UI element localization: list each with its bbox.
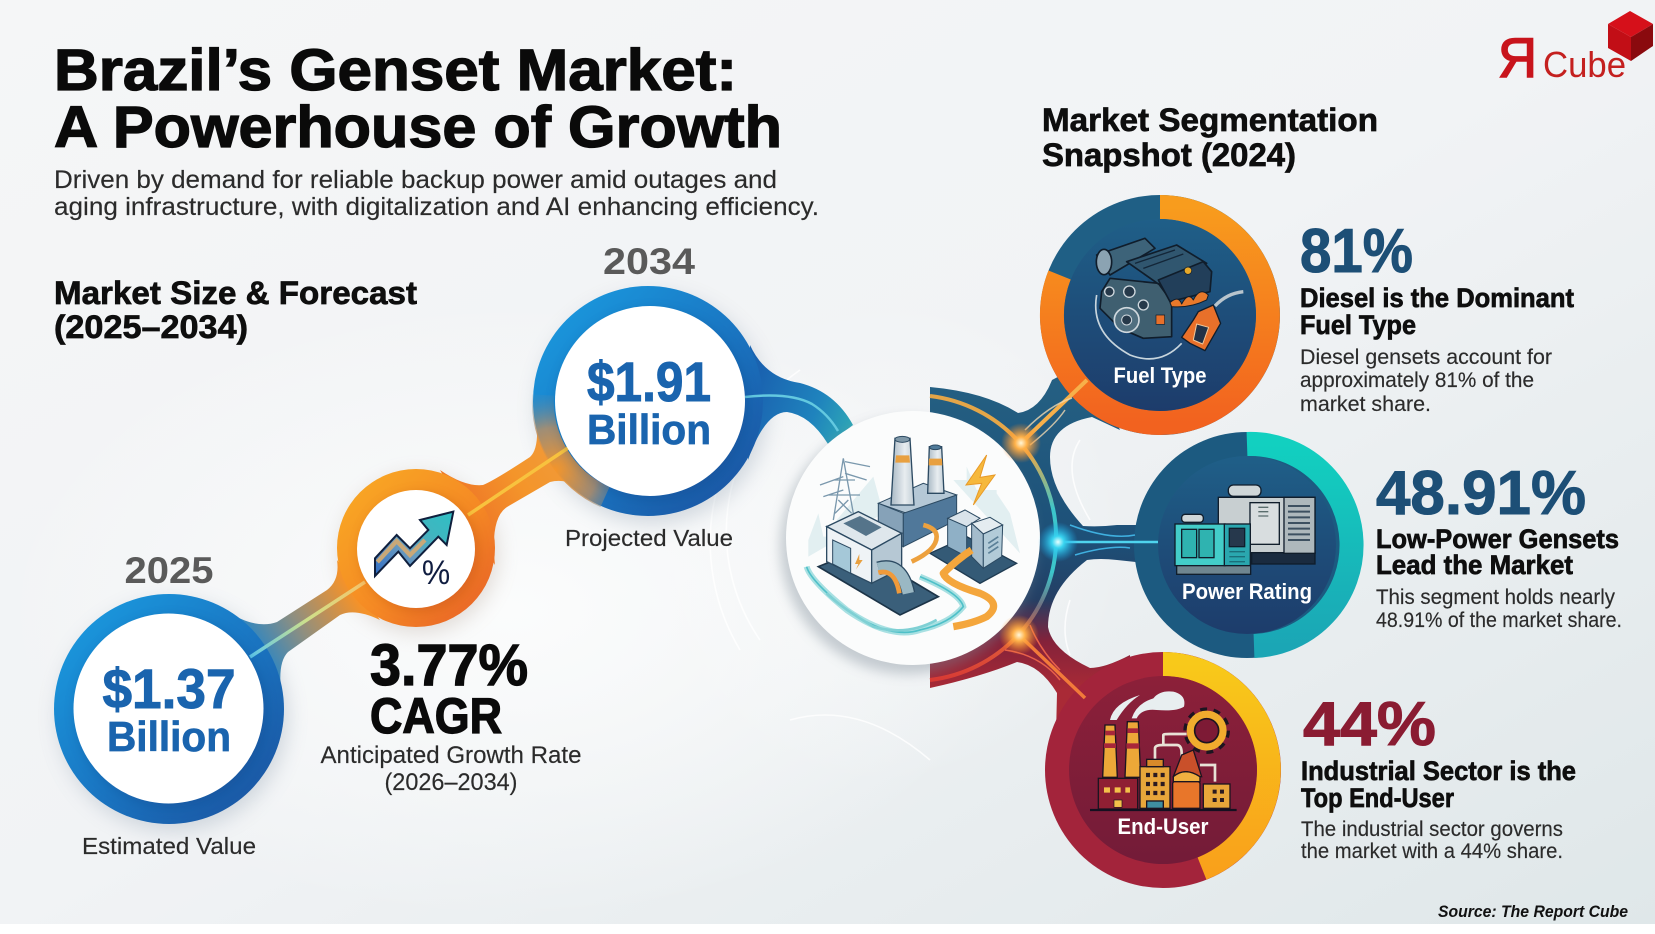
hub connector to segments: [930, 360, 1165, 735]
stat: diesel 81%: Diesel gensets account for: [1300, 346, 1552, 369]
growth chain: rings and connectors: [54, 286, 853, 831]
ring tint toward connector: [543, 395, 605, 497]
label: estimated value: Estimated Value: [82, 833, 256, 859]
panel: central power plant: [780, 411, 1040, 674]
label: projected value: Projected Value: [565, 525, 733, 551]
source note: Source: The Report Cube: [1438, 902, 1628, 921]
segment: end-user ring: End-User: [1118, 814, 1209, 839]
stat: CAGR: 3.77%: [370, 633, 528, 698]
circle: 2025 value: $1.37: [102, 657, 236, 720]
stat: CAGR: (2026–2034): [384, 769, 518, 796]
stat: low-power 48.91%: Lead the Market: [1376, 550, 1573, 580]
connector: CAGR to 2034: [440, 415, 590, 565]
hub energy lines and nodes: [930, 380, 1158, 698]
heading: market size and forecast: Market Size & Forecast: [54, 275, 417, 311]
heading: market segmentation: [1042, 102, 1378, 173]
icon: engine and fuel nozzle: [1096, 238, 1243, 359]
label: 2025: 2025: [124, 550, 214, 591]
segment: end-user ring: [1045, 652, 1281, 888]
logo: RCube: [1498, 11, 1653, 89]
stat: CAGR: Anticipated Growth Rate: [320, 742, 582, 769]
segment: power rating ring: [1134, 432, 1360, 658]
stat: low-power 48.91%: 48.91% of the market share.: [1376, 609, 1622, 632]
highlight lines: [250, 396, 838, 657]
ring: 2025: [54, 594, 284, 824]
icon: growth arrow and percent: %: [422, 554, 450, 592]
circle: 2034 value: [555, 306, 747, 500]
main building: [878, 483, 957, 515]
stat: diesel 81%: approximately 81% of the: [1300, 369, 1534, 392]
title: A Powerhouse of Growth: [54, 95, 782, 160]
heading: market segmentation: Snapshot (2024): [1042, 137, 1296, 173]
server units: [930, 537, 1017, 583]
icon: factory and gear: [1090, 691, 1237, 810]
subtitle: Driven by demand for reliable backup power amid outages and: [54, 166, 777, 194]
stat: diesel 81%: [1300, 217, 1574, 416]
stat: industrial 44%: The industrial sector governs: [1301, 818, 1563, 841]
segment: fuel type ring: Fuel Type: [1114, 363, 1206, 388]
heading: market segmentation: Market Segmentation: [1042, 102, 1378, 138]
circle: CAGR icon: [357, 490, 478, 611]
title: Brazil’s Genset Market:: [54, 38, 737, 103]
circle: 2025 value: Billion: [107, 713, 231, 760]
stat: diesel 81%: Fuel Type: [1300, 310, 1416, 340]
subtitle: aging infrastructure, with digitalization and AI enhancing efficiency.: [54, 193, 819, 221]
stat: CAGR: [320, 633, 582, 796]
segment: fuel type ring: [1040, 195, 1280, 435]
stat: industrial 44%: Top End-User: [1301, 783, 1454, 813]
label: 2034: 2034: [603, 241, 695, 282]
stat: diesel 81%: market share.: [1300, 393, 1431, 416]
icon: power plant illustration: [807, 436, 1020, 632]
icon: generator sets: [1175, 485, 1315, 574]
subtitle: [54, 166, 819, 221]
connector: 2034 to central hub: [748, 345, 853, 460]
stat: industrial 44%: [1301, 690, 1576, 863]
chimneys: [891, 438, 914, 505]
ring: 2034: [533, 286, 763, 516]
title: [54, 38, 782, 160]
stat: low-power 48.91%: 48.91%: [1376, 459, 1586, 528]
circle: 2034 value: Billion: [587, 406, 711, 453]
circle: 2025 value: [74, 614, 266, 807]
stat: low-power 48.91%: Low-Power Gensets: [1376, 524, 1619, 554]
stat: diesel 81%: 81%: [1300, 217, 1413, 286]
stat: industrial 44%: 44%: [1303, 690, 1436, 759]
ring: CAGR: [337, 469, 495, 627]
segment: power rating ring: Power Rating: [1182, 579, 1312, 604]
orange flows: [912, 525, 937, 562]
stat: industrial 44%: Industrial Sector is the: [1301, 756, 1576, 786]
genset base: [818, 550, 938, 615]
heading: market size and forecast: [54, 275, 417, 345]
lightning bolt: [966, 455, 995, 505]
logo: RCube: Cube: [1543, 44, 1626, 85]
connector: 2025 to CAGR: [225, 560, 380, 690]
stat: diesel 81%: Diesel is the Dominant: [1300, 283, 1574, 313]
logo: RCube: Я: [1498, 26, 1537, 89]
stat: industrial 44%: the market with a 44% share.: [1301, 840, 1563, 863]
stat: low-power 48.91%: [1376, 459, 1622, 632]
heading: market size and forecast: (2025–2034): [54, 309, 248, 345]
stat: low-power 48.91%: This segment holds nearly: [1376, 586, 1615, 609]
circle: 2034 value: $1.91: [587, 350, 711, 413]
stat: CAGR: CAGR: [370, 688, 502, 744]
